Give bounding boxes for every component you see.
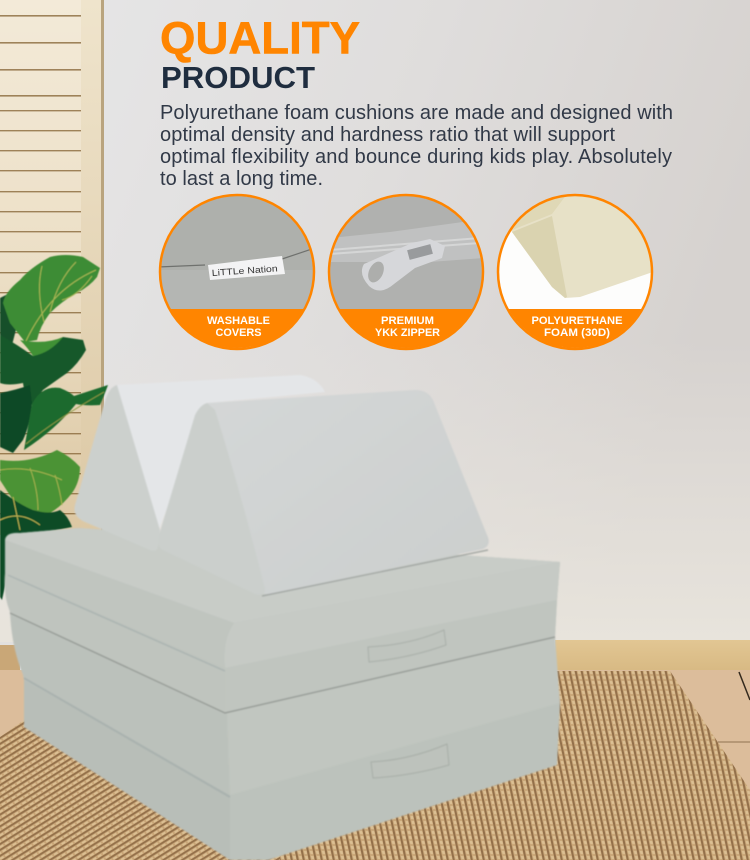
cushion: third slab [10,613,560,795]
handle: upper [368,630,446,662]
skirting board [555,640,750,670]
fiddle leaf plant [0,255,108,600]
description paragraph [160,102,673,190]
badge: polyurethane foam [497,190,653,351]
foam block [511,196,651,298]
cushion stack silhouette [5,528,560,860]
leaf: rear dark [0,294,18,345]
badge: washable covers [159,194,315,351]
left skirting board [0,645,20,670]
zipper tape [330,221,484,262]
fabric seam [159,248,315,267]
description paragraph: to last a long time. [160,168,323,190]
badge: premium ykk zipper: PREMIUM [381,315,434,327]
description paragraph: optimal density and hardness ratio that will support [160,124,615,146]
leaf: upper bright [3,255,100,342]
floor [0,670,750,860]
leaf: mid light fold [20,337,63,356]
fabric label: LiTTLe Nation [211,263,278,278]
badge: polyurethane foam: FOAM (30D) [544,327,610,339]
handle: lower [371,744,449,778]
leaf: mid dark left [0,335,86,405]
woven rug [0,671,750,860]
leaf: lower bright [0,450,80,513]
badge: washable covers: COVERS [216,327,262,339]
floor plank lines [718,672,750,742]
badge: premium ykk zipper: YKK ZIPPER [375,327,440,339]
description paragraph: Polyurethane foam cushions are made and designed with [160,102,673,124]
cushion: top slab [5,528,560,668]
badge: premium ykk zipper [328,194,484,351]
stacked foam play cushions [5,375,560,860]
title: product: PRODUCT [161,60,315,95]
fabric label [208,256,285,280]
badge: polyurethane foam: POLYURETHANE [532,315,622,327]
wall background [0,0,750,642]
leaf: long pointing right [24,385,108,450]
cushion: lip slab [5,573,557,713]
wedge: back [74,375,325,551]
leaf: lower left dark [0,385,32,453]
zipper slider and pull [362,239,445,291]
title: quality: QUALITY [160,12,360,64]
badge: washable covers: WASHABLE [207,315,270,327]
leaf: bottom dark [0,490,72,600]
cushion: bottom slab [24,678,560,860]
wooden louvre shutter [0,0,104,535]
wedge: front [158,390,489,596]
description paragraph: optimal flexibility and bounce during kids play. Absolutely [160,146,672,168]
